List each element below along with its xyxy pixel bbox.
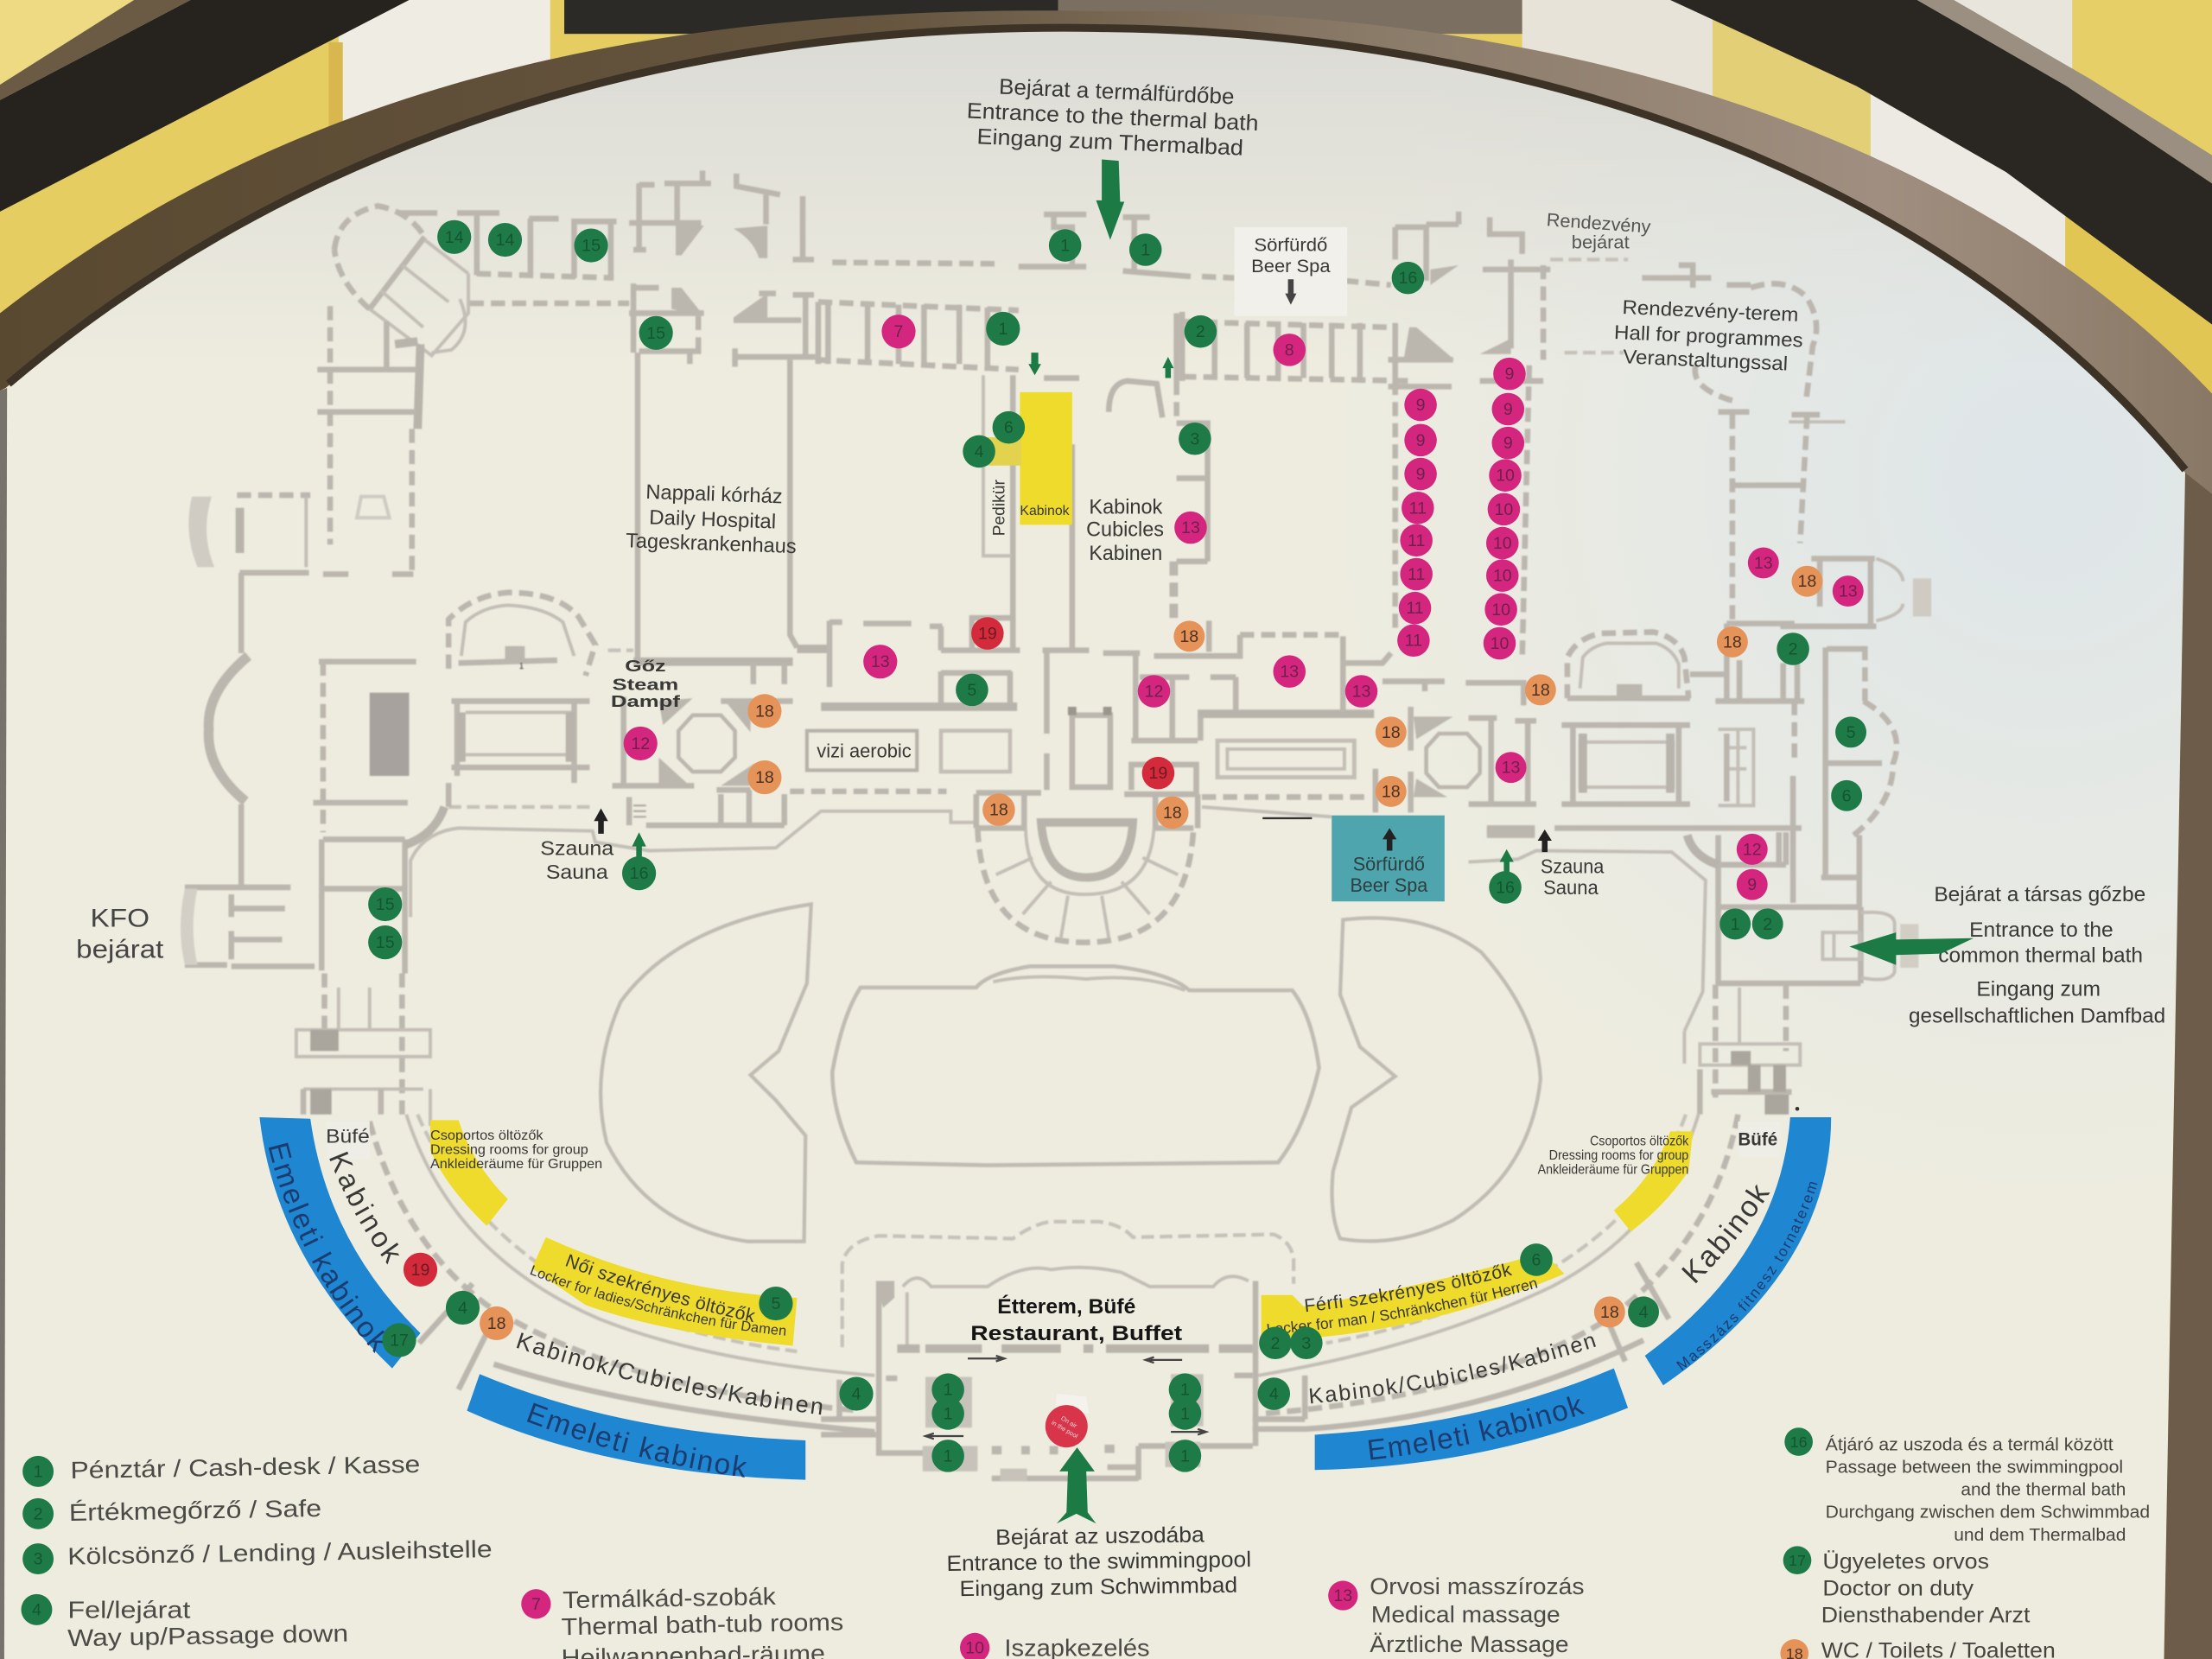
heading: swimming pool entrance (946, 1522, 1252, 1601)
right tower upper (1395, 212, 1459, 281)
floor plan walls (181, 171, 1931, 1481)
green map markers: 14 (496, 231, 514, 250)
label: group dressing rooms left (430, 1128, 602, 1172)
legend item 7: bath-tub rooms (521, 1583, 843, 1659)
green map markers: 15 (376, 895, 395, 914)
steam rooms (613, 697, 793, 825)
legend item 13: medical massage (1328, 1573, 1584, 1657)
yellow area: men lockers (1262, 1253, 1565, 1338)
curved label: ladies lockers: Női szekrényes öltözők (565, 1255, 755, 1322)
curved label: cubicles right: Kabinok/Cubicles/Kabinen (1310, 1336, 1596, 1403)
magenta map markers: 10 (1496, 467, 1515, 486)
centre pool (832, 966, 1319, 1166)
legend item 3: lending: 3 (34, 1550, 43, 1569)
label: daily hospital (626, 480, 798, 558)
label: restaurant: Étterem, Büfé (997, 1294, 1135, 1319)
green map markers: 2 (1270, 1334, 1280, 1353)
label: steam: Dampf (611, 692, 681, 710)
green map markers: 1 (1060, 237, 1070, 256)
legend item 17: doctor on duty (1783, 1546, 2030, 1628)
left tower block lower (629, 283, 704, 364)
green map markers: 14 (445, 228, 464, 247)
lower-right rooms (1719, 832, 1860, 985)
label: event hall: Veranstaltungssal (1623, 345, 1789, 375)
right of spine (1109, 313, 1211, 562)
hall right (1561, 725, 1690, 804)
label: cubicles: Kabinok (1089, 496, 1162, 518)
left annex (237, 493, 310, 497)
magenta map markers: 9 (1503, 434, 1513, 453)
label: sauna right: Sauna (1543, 876, 1599, 899)
right corridor rows (1182, 312, 1360, 381)
label: beer spa top (1251, 236, 1331, 276)
green map markers: 4 (1269, 1385, 1279, 1404)
legend item 16: passage between pool and thermal bath: and the thermal bath (1961, 1481, 2126, 1500)
blue band: right lower cabins (1315, 1369, 1628, 1470)
green map markers: 4 (458, 1299, 467, 1318)
label: common thermal bath entrance: gesellschaftlichen Damfbad (1909, 1006, 2165, 1028)
magenta map markers: 12 (631, 734, 650, 753)
pedicure box (983, 375, 1012, 556)
west wall and semicircle (241, 573, 416, 974)
magenta map markers: 10 (1491, 634, 1510, 653)
green map markers: 1 (1180, 1381, 1190, 1400)
label: common thermal bath entrance: Eingang zum (1976, 979, 2101, 1001)
legend item 13: medical massage: Orvosi masszírozás (1370, 1573, 1584, 1599)
label: restaurant (970, 1294, 1182, 1345)
label: sauna left (540, 836, 614, 883)
hospital walls (638, 353, 797, 663)
curved label: men lockers: Férfi szekrényes öltözők (1305, 1263, 1512, 1312)
red on-duty sign: On air (1059, 1414, 1079, 1430)
legend item 16: passage between pool and thermal bath: 16 (1790, 1433, 1808, 1451)
magenta map markers: 9 (1416, 465, 1426, 484)
yellow area: right group dressing rooms (1614, 1131, 1693, 1231)
heading: swimming pool entrance: Entrance to the swimmingpool (946, 1548, 1251, 1576)
stair room right (1719, 729, 1753, 805)
label: daily hospital: Daily Hospital (649, 506, 777, 534)
label: group dressing rooms right: Csoportos öltözők (1590, 1135, 1689, 1149)
legend item 13: medical massage: 13 (1333, 1586, 1352, 1605)
label: buffet left: Büfé (326, 1125, 370, 1147)
magenta map markers: 7 (894, 322, 903, 341)
white sticker behind beer spa label (1235, 227, 1347, 316)
magenta map markers: 11 (1408, 565, 1425, 584)
yellow area: cabins (1020, 392, 1072, 524)
legend item 3: lending: Kölcsönző / Lending / Ausleihstelle (67, 1535, 493, 1570)
right tower block upper (736, 174, 814, 259)
dot above right blue band (1796, 1107, 1799, 1111)
upper-right small rooms (1715, 624, 1804, 701)
right D pool (1332, 918, 1541, 1241)
legend item 7: bath-tub rooms: Termálkád-szobák (563, 1583, 776, 1613)
central spine (1043, 378, 1236, 794)
dark arch behind the board, left (0, 0, 409, 212)
room walls near 13 (830, 375, 1020, 705)
label: event hall (1612, 296, 1805, 375)
green map markers: 6 (1004, 418, 1014, 437)
right tower lower (1389, 323, 1453, 386)
magenta map markers: 12 (1145, 683, 1163, 702)
curved label: massage band: Masszázs fitnesz tornaterem (1676, 1182, 1818, 1370)
frame left post (0, 388, 7, 1659)
label: beer spa top: Sörfürdő (1254, 236, 1327, 256)
magenta map markers: 10 (1491, 601, 1510, 620)
label: group dressing rooms left: Ankleideräume für Gruppen (430, 1157, 602, 1172)
curved label: cabins right: Kabinok (1681, 1184, 1770, 1284)
label: buffet right: Büfé (1738, 1130, 1777, 1150)
arch bath right (1567, 632, 1688, 698)
red on-duty sign (1046, 1394, 1089, 1447)
magenta map markers: 9 (1416, 431, 1426, 450)
dark arch edge, right (1917, 0, 2212, 183)
dark arch edge, left (0, 0, 190, 100)
green map markers: 16 (630, 864, 649, 883)
orange map markers: 18 (755, 702, 774, 721)
orange map markers: 18 (1179, 627, 1198, 646)
east entrance (1822, 912, 1895, 980)
label: common thermal bath entrance: Bejárat a társas gőzbe (1934, 884, 2145, 906)
legend item 16: passage between pool and thermal bath: und dem Thermalbad (1954, 1526, 2126, 1545)
blue band: left upper cabins (259, 1117, 421, 1369)
left tower block upper (629, 171, 711, 252)
legend item 17: doctor on duty: Ügyeletes orvos (1822, 1550, 1989, 1574)
magenta map markers: 10 (1493, 534, 1512, 553)
legend item 16: passage between pool and thermal bath: Átjáró az uszoda és a termál között (1826, 1434, 2113, 1454)
right wing vertical (1732, 415, 1807, 620)
legend item 1: cash-desk: Pénztár / Cash-desk / Kasse (70, 1451, 421, 1484)
label: event hall: Hall for programmes (1614, 321, 1803, 352)
octagon right (1427, 734, 1480, 787)
curved label: ladies lockers translation: Locker for ladies/Schränkchen für Damen (531, 1265, 786, 1336)
label: beer spa teal: Sörfürdő (1353, 853, 1425, 874)
magenta map markers: 13 (1839, 582, 1858, 601)
label: KFO entrance: KFO (90, 905, 149, 933)
curved label: cabins left: Kabinok (329, 1151, 399, 1265)
right stairs block (1715, 985, 1786, 1097)
legend item 16: passage between pool and thermal bath: Passage between the swimmingpool (1826, 1458, 2123, 1477)
teal beer spa box (1332, 816, 1445, 901)
magenta map markers: 9 (1504, 365, 1514, 384)
heading: thermal bath entrance: Eingang zum Thermalbad (976, 124, 1244, 161)
vizi aerobic room (807, 731, 917, 770)
legend item 16: passage between pool and thermal bath (1784, 1427, 2150, 1545)
magenta map markers: 11 (1405, 632, 1422, 651)
magenta map markers: 13 (1502, 759, 1521, 778)
arrow: common thermal bath entrance (1849, 932, 1974, 965)
orange map markers: 18 (755, 768, 774, 787)
orange map markers: 18 (1382, 782, 1401, 801)
orange map markers: 18 (1531, 681, 1550, 700)
blue band: left lower cabins (467, 1374, 805, 1480)
central semicircle stair (1041, 823, 1133, 878)
label: steam: Steam (613, 675, 678, 693)
green map markers: 2 (1196, 322, 1205, 341)
label: beer spa teal (1350, 853, 1428, 896)
curved label: upper cabins bottom left: Emeleti kabinok (527, 1403, 747, 1478)
magenta map markers: 13 (1280, 663, 1299, 682)
orange map markers: 18 (1382, 723, 1401, 742)
east pavilion (1821, 647, 1882, 907)
magenta map markers (624, 315, 1864, 900)
label: group dressing rooms right: Ankleideräume für Gruppen (1538, 1162, 1688, 1177)
event hall apse (1642, 265, 1751, 288)
curved label: upper cabins bottom right: Emeleti kabinok (1369, 1396, 1585, 1460)
label: pedicure: Pedikür (989, 480, 1008, 536)
label: cabins in yellow: Kabinok (1020, 504, 1070, 518)
magenta map markers: 9 (1747, 875, 1757, 894)
label: water aerobics: vizi aerobic (817, 741, 912, 762)
green map markers: 1 (1141, 241, 1150, 260)
red map markers: 19 (978, 625, 997, 644)
legend item 4: passage (21, 1594, 348, 1651)
blue band: right massage rooms (1645, 1117, 1831, 1385)
magenta map markers: 11 (1408, 531, 1425, 550)
magenta map markers: 10 (1493, 567, 1512, 586)
legend item 4: passage: Fel/lejárat (67, 1597, 191, 1624)
label: sauna right: Szauna (1541, 855, 1605, 878)
green map markers (368, 220, 1866, 1472)
label: steam: Gőz (625, 657, 666, 675)
magenta map markers: 13 (871, 652, 890, 671)
upper-left rooms corridor (399, 213, 616, 278)
green map markers: 4 (975, 442, 984, 461)
label: group dressing rooms right (1538, 1135, 1689, 1177)
legend item 3: lending (22, 1535, 493, 1574)
label: sauna left: Szauna (540, 836, 614, 859)
arched bath left (448, 593, 595, 676)
stair mark (633, 805, 646, 817)
label: common thermal bath entrance: common thermal bath (1938, 944, 2143, 967)
legend item 4: passage: 4 (32, 1600, 41, 1619)
frame right post (2164, 473, 2212, 1659)
green map markers: 15 (376, 933, 395, 952)
legend item 10: mud treatment (960, 1633, 1150, 1659)
label: group dressing rooms right: Dressing rooms for group (1549, 1148, 1688, 1163)
magenta map markers: 10 (1495, 500, 1513, 519)
green map markers: 5 (1847, 723, 1856, 742)
label: cubicles: Kabinen (1089, 543, 1162, 565)
magenta map markers: 12 (1743, 840, 1762, 859)
arrow: thermal bath entrance (1096, 159, 1124, 240)
rotunda vestibule (370, 240, 468, 355)
label: cubicles (1086, 496, 1164, 565)
label: sauna left: Sauna (546, 861, 608, 883)
green map markers: 16 (1398, 269, 1417, 288)
green map markers: 1 (944, 1404, 953, 1423)
top-left rotunda (334, 206, 424, 309)
heading: thermal bath entrance: Entrance to the thermal bath (966, 99, 1259, 136)
label: KFO entrance: bejárat (76, 936, 163, 964)
label: sauna right (1541, 855, 1605, 899)
KFO annex (185, 887, 315, 966)
legend item 13: medical massage: Ärztliche Massage (1370, 1631, 1569, 1657)
legend item 1: cash-desk: 1 (34, 1462, 43, 1481)
label: event hall: Rendezvény-terem (1622, 296, 1799, 326)
yellow area: near lift (988, 437, 1021, 466)
left corridor rows (818, 302, 988, 366)
green map markers: 1 (944, 1446, 953, 1465)
green map markers: 3 (1301, 1334, 1311, 1353)
curved building right (1258, 1115, 1699, 1376)
green map markers: 2 (1789, 640, 1798, 659)
legend item 17: doctor on duty: Doctor on duty (1822, 1577, 1974, 1601)
magenta map markers: 11 (1409, 499, 1427, 518)
courtyard line right (1469, 850, 1706, 1031)
red map markers (404, 617, 1174, 1287)
orange map markers: 18 (487, 1314, 506, 1333)
green map markers: 16 (1496, 878, 1515, 897)
label: event entrance: bejárat (1572, 232, 1630, 252)
curved label: cubicles left: Kabinok/Cubicles/Kabinen (517, 1332, 823, 1415)
arrow: beer spa (1285, 279, 1296, 305)
green map markers: 15 (582, 237, 601, 256)
green map markers: 2 (1763, 915, 1772, 934)
legend item 1: cash-desk (22, 1451, 421, 1487)
bottom centre block (842, 1222, 1294, 1347)
label: daily hospital: Nappali kórház (645, 481, 783, 508)
label: cubicles: Cubicles (1086, 518, 1164, 541)
hall centre (1217, 741, 1354, 778)
yellow area: ladies lockers (532, 1237, 797, 1346)
green map markers: 4 (852, 1385, 861, 1404)
red map markers: 19 (1149, 764, 1167, 783)
dark rectangle (370, 693, 409, 776)
legend item 7: bath-tub rooms: 7 (531, 1595, 541, 1614)
green map markers: 1 (998, 320, 1007, 339)
orange map markers: 18 (1798, 572, 1816, 591)
courtyard line left (410, 811, 976, 917)
heading: thermal bath entrance: Bejárat a termálfürdőbe (998, 75, 1235, 109)
legend item 4: passage: Way up/Passage down (67, 1620, 348, 1651)
small mark: 1 (519, 662, 524, 671)
green map markers: 5 (772, 1294, 781, 1313)
magenta map markers: 9 (1416, 396, 1426, 415)
orange map markers: 18 (1163, 804, 1182, 823)
octagon left (678, 715, 735, 772)
dark arch behind the board, right (1670, 0, 2212, 325)
label: group dressing rooms left: Dressing rooms for group (430, 1143, 588, 1158)
legend item 7: bath-tub rooms: Thermal bath-tub rooms (561, 1609, 843, 1640)
orange map markers: 18 (989, 801, 1008, 820)
label: KFO entrance (76, 905, 163, 964)
magenta map markers: 13 (1181, 518, 1200, 537)
green map markers: 1 (1180, 1404, 1190, 1423)
columns east (1793, 701, 1796, 758)
green map markers: 4 (1639, 1303, 1649, 1322)
yellow area: left group dressing rooms (430, 1120, 508, 1226)
small arrows (594, 353, 1552, 1439)
magenta map markers: 13 (1352, 683, 1371, 702)
legend item 17: doctor on duty: Diensthabender Arzt (1821, 1604, 2030, 1628)
thermal corridor dashes (832, 263, 1391, 285)
heading: swimming pool entrance: Bejárat az uszodába (995, 1522, 1205, 1550)
green map markers: 5 (967, 681, 976, 700)
magenta map markers: 9 (1503, 400, 1513, 419)
label: steam (611, 657, 681, 710)
magenta map markers: 8 (1285, 340, 1294, 359)
green map markers: 1 (1180, 1446, 1190, 1465)
red map markers: 19 (411, 1261, 429, 1280)
green map markers: 15 (646, 324, 665, 343)
arrow: swimming pool entrance (1057, 1447, 1096, 1523)
heading: swimming pool entrance: Eingang zum Schwimmbad (959, 1573, 1237, 1601)
curved label: men lockers translation: Locker for man / Schränkchen für Herren (1267, 1281, 1538, 1333)
orange map markers (480, 566, 1822, 1340)
label: beer spa teal: Beer Spa (1350, 874, 1428, 896)
red on-duty sign: in the pool (1050, 1419, 1079, 1440)
gate blocks (1019, 214, 1086, 267)
label: group dressing rooms left: Csoportos öltözők (430, 1128, 543, 1143)
green map markers: 1 (1731, 915, 1740, 934)
legend item 2: safe: 2 (34, 1504, 43, 1523)
left D pool (601, 905, 811, 1242)
legend item 13: medical massage: Medical massage (1371, 1602, 1560, 1628)
green map markers: 3 (1190, 429, 1199, 448)
orange map markers: 18 (1723, 632, 1742, 652)
label patches on curved corridor (326, 1122, 370, 1160)
label: event entrance: Rendezvény (1546, 210, 1652, 238)
frame inner shadow line (9, 28, 2185, 470)
label: restaurant: Restaurant, Buffet (970, 1322, 1182, 1345)
legend item 10: mud treatment: 10 (965, 1638, 984, 1657)
green map markers: 6 (1532, 1250, 1541, 1269)
label: event entrance (1546, 210, 1652, 252)
right tower block lower (734, 294, 816, 366)
curved building left (406, 1115, 874, 1376)
legend item 2: safe: Értékmegőrző / Safe (69, 1495, 321, 1526)
label: common thermal bath entrance: Entrance to the (1969, 919, 2113, 942)
label: beer spa top: Beer Spa (1251, 257, 1331, 276)
left lower stairs block (325, 974, 402, 1115)
curved label: upper cabins left: Emeleti kabinok (268, 1142, 385, 1353)
green map markers: 6 (1842, 786, 1852, 805)
brown board frame arch (0, 10, 2212, 493)
left wing (330, 306, 412, 573)
panel top shading (0, 30, 2185, 564)
treatment corridors (1395, 365, 1529, 660)
label: common thermal bath entrance (1909, 884, 2165, 1028)
legend item 17: doctor on duty: 17 (1789, 1552, 1806, 1569)
legend item 16: passage between pool and thermal bath: Durchgang zwischen dem Schwimmbad (1826, 1503, 2150, 1522)
green map markers: 17 (390, 1332, 409, 1351)
magenta map markers: 13 (1754, 554, 1773, 573)
orange map markers: 18 (1600, 1303, 1619, 1322)
event wing columns (1480, 217, 1550, 381)
hall left (451, 698, 589, 783)
magenta map markers: 11 (1406, 599, 1424, 618)
legend item 2: safe (22, 1495, 321, 1529)
heading: thermal bath entrance (965, 73, 1260, 161)
label: daily hospital: Tageskrankenhaus (626, 530, 797, 558)
green map markers: 1 (944, 1381, 953, 1400)
